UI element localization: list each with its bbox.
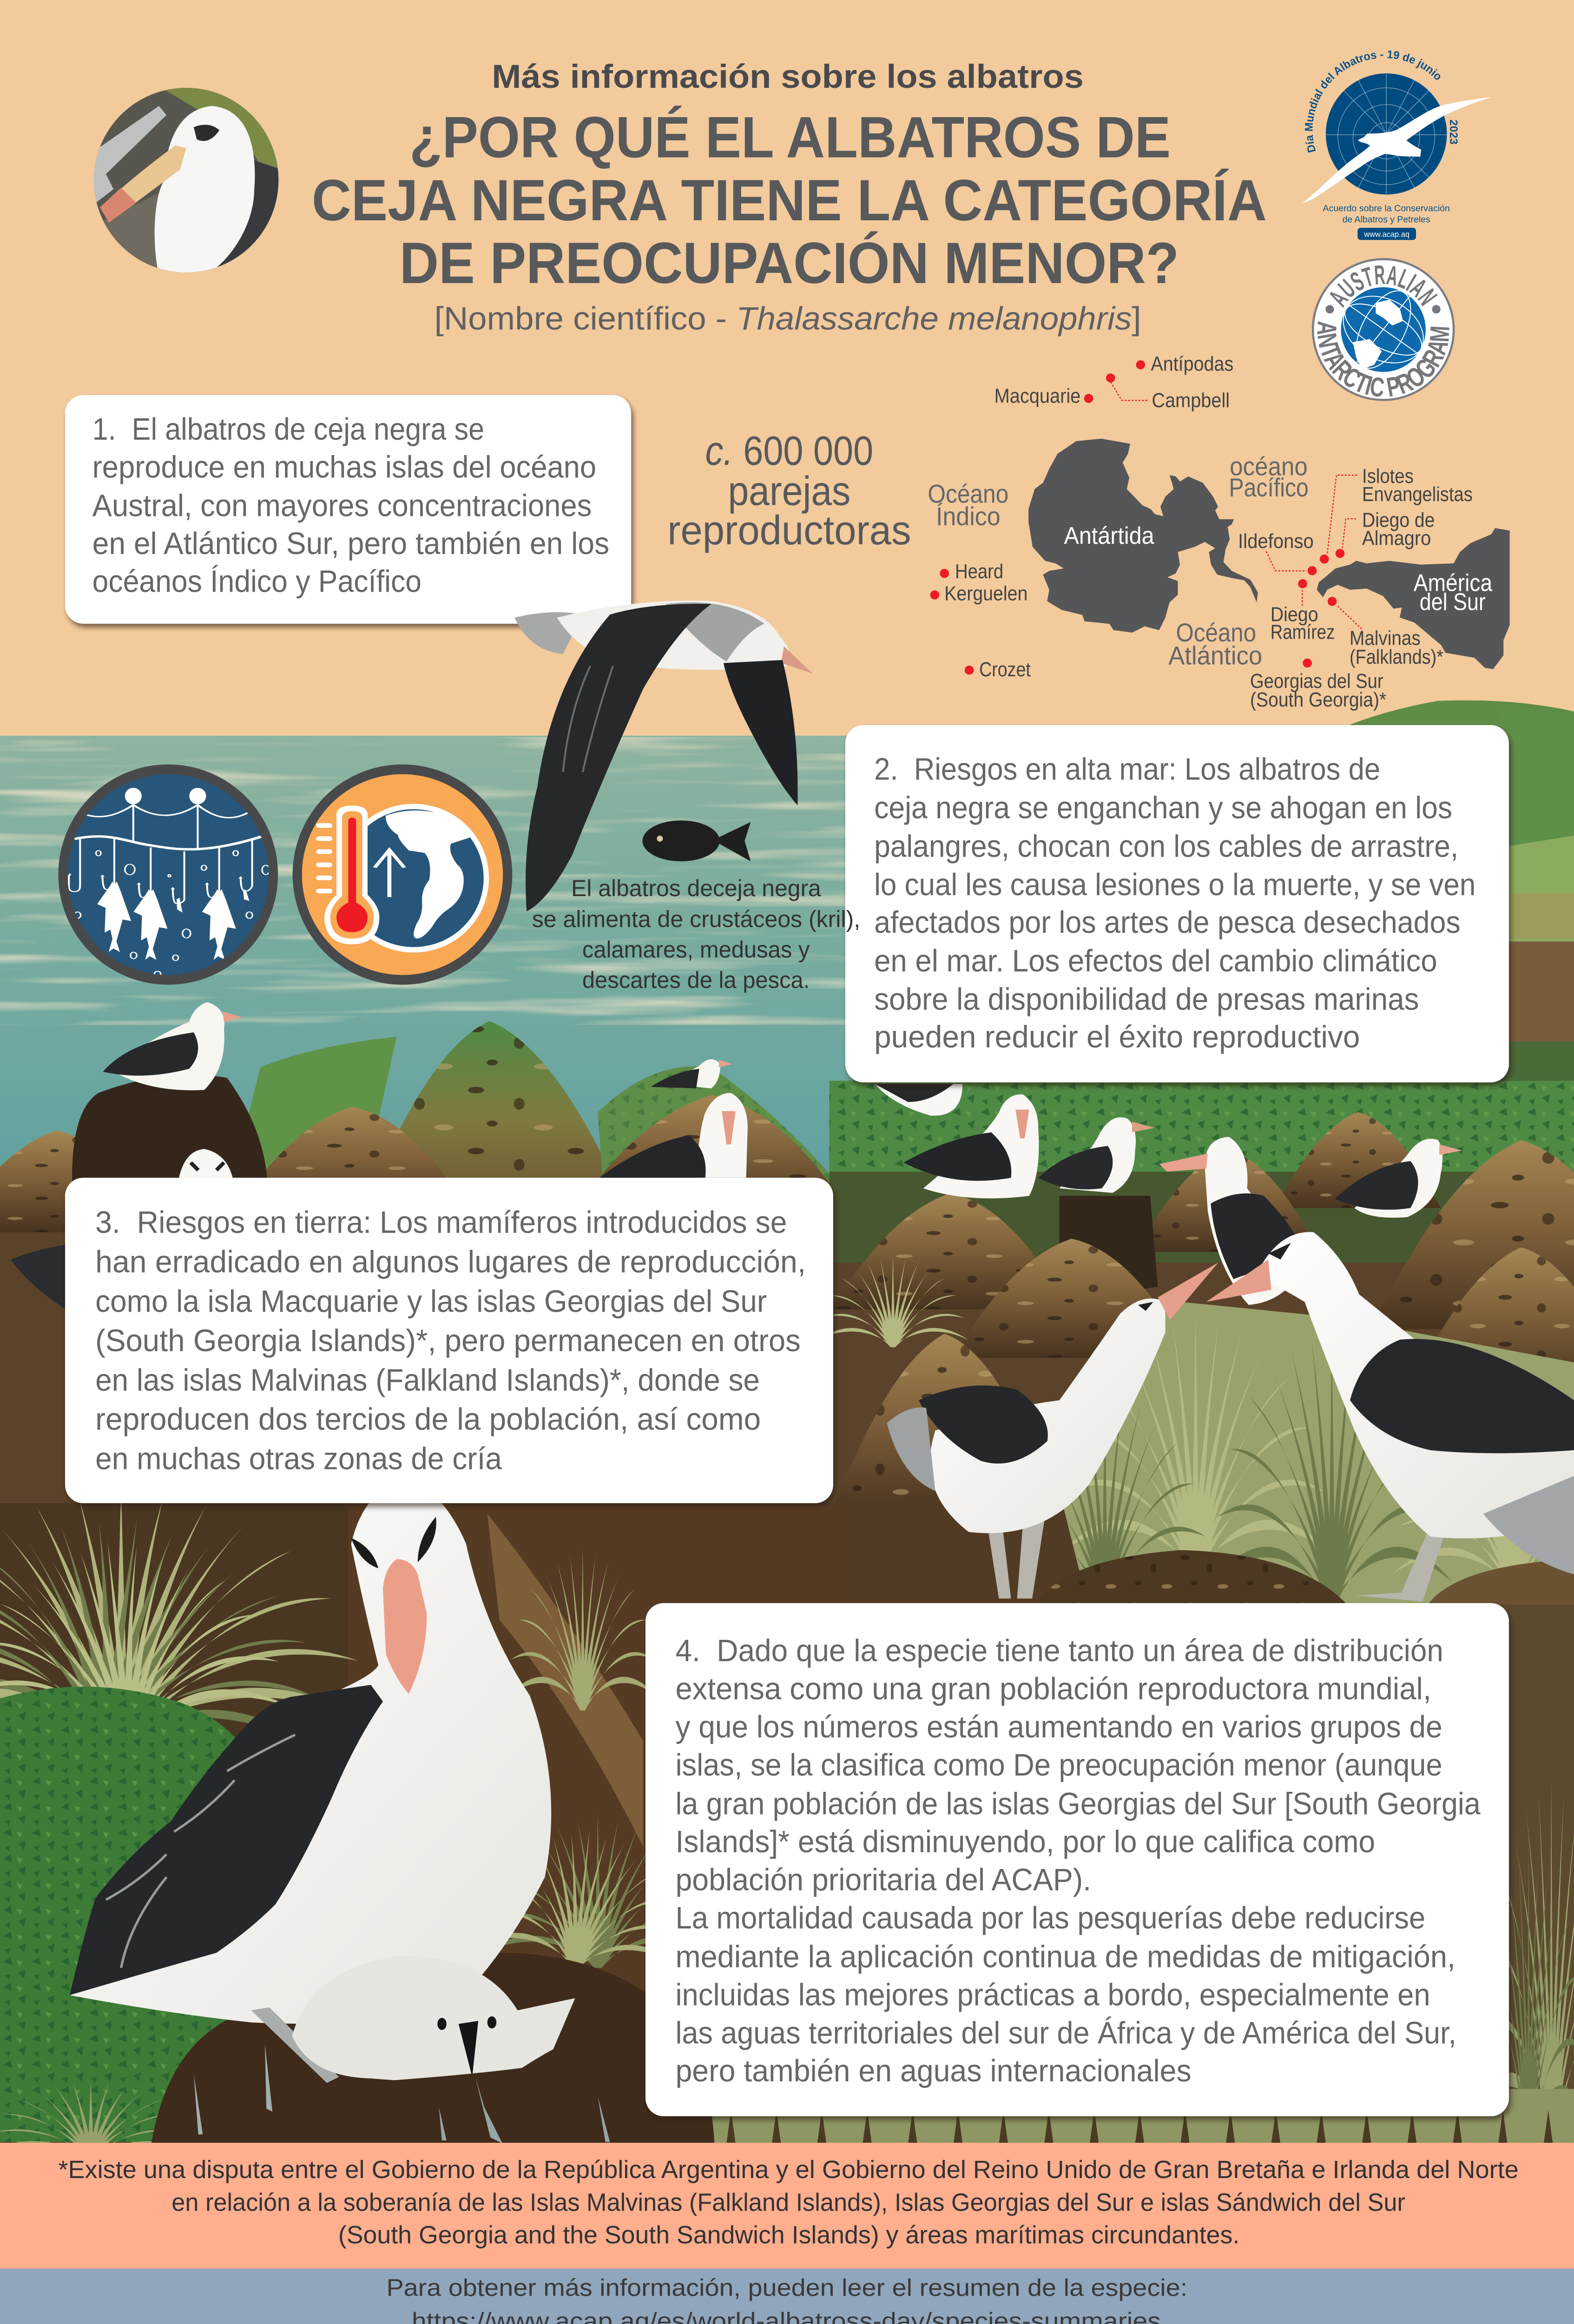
title [312,105,1267,296]
map: labels: Pacífico [1229,473,1309,502]
panel: text box 2: 2. Riesgos en alta mar: Los albatros de [874,752,1380,786]
panel: text box 1: océanos Índico y Pacífico [92,564,421,599]
logo: Australian Antarctic Program: ANTARCTIC PROGRAM [1311,321,1455,403]
bird: under box 2 [875,1084,962,1116]
panel: text box 2: afectados por los artes de pesca desechados [874,905,1461,940]
panel: text box 2: palangres, chocan con los cables de arrastre, [874,829,1458,864]
map: labels: Atlántico [1168,641,1262,670]
bird: right on grass nest [1335,1139,1462,1218]
map: labels: Océano [928,479,1008,508]
big bird with chick [70,1478,714,2144]
map: labels: océano [1230,452,1308,481]
map: leader lines [1111,382,1363,630]
footnote band: (South Georgia and the South Sandwich Islands) y áreas marítimas circundantes. [338,2221,1239,2249]
nest front rim [272,2016,714,2144]
panel: text box 4: y que los números están aumentando en varios grupos de [675,1710,1442,1744]
big bird leg [251,2007,339,2083]
text: diet description: descartes de la pesca. [582,966,810,993]
right edge fields [1498,712,1574,1102]
logo: ACAP World Albatross Day: www.acap.aq [1363,230,1409,239]
text: diet description: se alimenta de crustáceos (kril), [532,905,860,932]
panel: text box 3: como la isla Macquarie y las islas Georgias del Sur [95,1284,767,1319]
map: labels: Almagro [1362,527,1431,549]
map: labels: Crozet [979,658,1031,681]
grass strip under box 4 [651,2089,1574,2144]
guano streaks [439,2077,610,2144]
map: labels: Ildefonso [1238,530,1314,553]
text: diet description: calamares, medusas y [582,936,810,963]
illustration: flying albatross [514,601,813,911]
panel: text box 4: 4. Dado que la especie tiene tanto un área de distribución [675,1634,1443,1668]
stat: breeding pairs: c. 600 000 [705,428,873,474]
bird: peeking head [178,1149,233,1179]
central grass fans [470,1548,719,1979]
more information band [0,2269,1574,2324]
map: labels: Antípodas [1151,353,1233,376]
bird: front facing on mound [903,1094,1039,1198]
logo: Australian Antarctic Program: AUSTRALIAN [1323,260,1442,311]
bird: standing facing left [1159,1137,1309,1305]
map: labels: Antártida [1064,522,1154,549]
map: labels: Envangelistas [1362,483,1473,506]
panel: text box 4: pero también en aguas internacionales [675,2054,1192,2088]
panel: text box 2: en el mar. Los efectos del cambio climático [874,944,1437,978]
logo: Australian Antarctic Program [1311,259,1455,403]
map: South America [1317,528,1510,669]
photo: albatross portrait [91,85,282,276]
olive grass field right [817,1254,1574,1627]
map: labels: Malvinas [1350,627,1421,649]
panel: text box 2: lo cual les causa lesiones o la muerte, y se ven [874,868,1475,902]
chick [292,1956,575,2081]
stat: breeding pairs: parejas [728,468,850,514]
bird: courting right [1206,1232,1574,1602]
nest mound left [72,1075,268,1199]
panel: text box 1: en el Atlántico Sur, pero también en los [92,527,609,561]
chick beak and eyes [437,2016,496,2077]
heading: kicker: Más información sobre los albatros [492,58,1084,95]
text: diet description [532,875,860,993]
right side grass behind box 4 [1468,1604,1574,2150]
map: labels: Campbell [1152,389,1230,412]
logo: ACAP World Albatross Day: de Albatros y Petreles [1343,215,1430,225]
icon: longline fishing hooks [58,765,278,985]
panel: text box 3: en muchas otras zonas de cría [95,1442,502,1476]
big bird body [70,1478,551,2024]
map: labels: (South Georgia)* [1250,688,1386,711]
panel: text box 2: sobre la disponibilidad de presas marinas [874,982,1419,1017]
icon: thermometer and warming globe [293,765,512,985]
big bird feather lines [106,1735,295,1968]
map: labels: Ramírez [1271,621,1335,643]
back mounds left [0,1021,855,1232]
green hill lower left [0,1687,265,2157]
map: labels: Índico [936,502,1001,531]
panel: text box 4: islas, se la clasifica como De preocupación menor (aunque [675,1748,1442,1783]
map: breeding islands [928,353,1510,711]
panel: text box 4: incluidas las mejores prácticas a bordo, especialmente en [675,1978,1430,2012]
sea brush streaks [0,737,863,1025]
panel: text box 3: 3. Riesgos en tierra: Los mamíferos introducidos se [95,1205,787,1240]
panel: text box 2 [845,725,1509,1083]
panel: text box 4: la gran población de las islas Georgias del Sur [South Georgia [675,1787,1481,1821]
panel: text box 4: población prioritaria del ACAP). [675,1863,1091,1897]
lower central brown ground [166,1503,848,2142]
panel: text box 3: reproducen dos tercios de la población, así como [95,1402,761,1437]
title: CEJA NEGRA TIENE LA CATEGORÍA [312,167,1267,233]
footnote band: *Existe una disputa entre el Gobierno de la República Argentina y el Gobierno del Reino Unido de Gran Bretaña e Irlanda del Norte [58,2156,1519,2184]
map: labels: América [1414,569,1492,596]
footnote band: en relación a la soberanía de las Islas Malvinas (Falkland Islands), Islas Georgias del Sur e islas Sándwich del Sur [171,2189,1405,2217]
bird: left on nest [103,1002,242,1090]
left grass fan [0,1486,371,1771]
big bird eyes [351,1517,436,1568]
map: labels: Kerguelen [944,582,1027,605]
panel: text box 2: ceja negra se enganchan y se ahogan en los [874,791,1452,825]
logo: ACAP World Albatross Day: 2023 [1447,119,1460,145]
panel: text box 4: las aguas territoriales del sur de África y de América del Sur, [675,2016,1456,2050]
footnote band [0,2143,1574,2270]
panel: text box 4 [645,1603,1509,2116]
map: labels: Diego [1271,603,1318,626]
panel: text box 1: Austral, con mayores concentraciones [92,489,592,523]
bird: courting left [887,1262,1218,1598]
map: labels: Islotes [1362,465,1414,488]
back mounds right [830,1081,1574,1517]
panel: text box 4: Islands]* está disminuyendo, por lo que califica como [675,1825,1375,1859]
panel: text box 1 [65,395,631,624]
icon: fish [642,820,751,861]
panel: text box 3 [65,1178,833,1503]
map: labels [928,353,1492,711]
map: labels: Diego de [1362,508,1435,531]
panel: text box 2: pueden reducir el éxito reproductivo [874,1020,1360,1055]
panel: text box 1: reproduce en muchas islas del océano [92,450,596,485]
subtitle: scientific name: [Nombre científico - Thalassarche melanophris ] [435,300,1141,337]
map: labels: Heard [955,560,1003,583]
panel: text box 3: (South Georgia Islands)*, pero permanecen en otros [95,1324,801,1358]
title: ¿POR QUÉ EL ALBATROS DE [409,105,1171,170]
big nest [151,1953,714,2144]
map: island markers [930,360,1344,675]
panel: text box 3: en las islas Malvinas (Falkland Islands)*, donde se [95,1363,760,1398]
panel: text box 3: han erradicado en algunos lugares de reproducción, [95,1245,806,1279]
logo: ACAP World Albatross Day: Día Mundial del Albatros - 19 de junio [1303,48,1444,154]
bird: profile on mound [1038,1117,1155,1193]
bird: small far [651,1059,732,1089]
bird: left edge partial [11,1244,68,1311]
logo: ACAP World Albatross Day [1302,48,1492,240]
panel: text box 4: extensa como una gran población reproductora mundial, [675,1672,1431,1706]
scene: illustrated landscape [0,700,1574,2157]
big bird wing [70,1685,383,1995]
map: labels: del Sur [1420,589,1486,616]
title: DE PREOCUPACIÓN MENOR? [400,230,1179,296]
stat: breeding pairs: reproductoras [667,507,911,553]
stat: breeding pairs [667,428,911,553]
sea [0,736,1574,1250]
panel: text box 4: La mortalidad causada por las pesquerías debe reducirse [675,1901,1425,1935]
ground base [0,1196,1574,2150]
mid ground mounds under the pair [832,1491,1574,1620]
map: labels: Océano [1176,618,1256,647]
map: Antarctica [1028,439,1258,633]
panel: text box 4: mediante la aplicación continua de medidas de mitigación, [675,1940,1455,1974]
map: labels: Georgias del Sur [1250,670,1383,693]
map: labels: (Falklands)* [1350,646,1443,668]
map: labels: Macquarie [994,384,1080,407]
logo: ACAP World Albatross Day: Acuerdo sobre la Conservación [1323,204,1450,214]
bird: central front facing [599,1093,748,1178]
text: diet description: El albatros deceja negra [571,875,822,901]
big bird beak [383,1559,427,1694]
panel: text box 1: 1. El albatros de ceja negra se [92,412,484,447]
more information band: Para obtener más información, pueden leer el resumen de la especie: [386,2275,1187,2302]
green hill at top right [1314,700,1574,908]
